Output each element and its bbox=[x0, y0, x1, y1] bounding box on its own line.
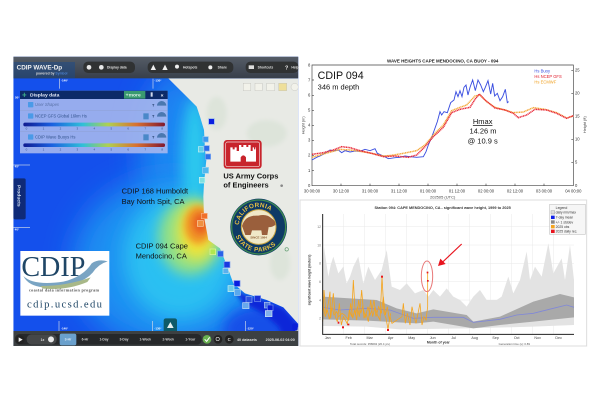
shallow coastal water, southern bight bbox=[233, 288, 298, 347]
line: Hs ECMWF bbox=[312, 95, 573, 157]
bottom timeline bar: 2025-06-02 04:00 bbox=[266, 338, 295, 342]
display data panel: +more bbox=[126, 93, 141, 99]
display data panel: Display data bbox=[30, 93, 60, 99]
month labels: Jun bbox=[430, 336, 436, 340]
x axis labels bbox=[304, 188, 582, 193]
top toolbar: powered by Symbol bbox=[36, 72, 68, 76]
left axis title: Height (m) bbox=[301, 116, 305, 134]
footer notes: Total records: 358092 (20.4 yrs) bbox=[350, 342, 390, 346]
y axis labels: 8 bbox=[319, 262, 321, 266]
x axis title: Month of year bbox=[427, 340, 450, 344]
panel: wave model map bbox=[13, 56, 298, 346]
x axis labels: 04 00:00 bbox=[565, 188, 582, 193]
x axis labels: 02 00:00 bbox=[478, 188, 495, 193]
logo: US Army Corps of Engineers: of Engineers bbox=[223, 181, 269, 190]
longitude labels top: -130° bbox=[154, 79, 162, 83]
layer: CDIP wave buoys bbox=[23, 133, 166, 152]
bottom timeline bar: 3-Day bbox=[119, 338, 129, 342]
top toolbar: Share bbox=[218, 66, 227, 70]
left axis labels: 0 bbox=[308, 183, 311, 188]
x axis labels: 02 12:00 bbox=[507, 188, 524, 193]
right axis labels bbox=[575, 68, 580, 188]
map controls bbox=[243, 83, 298, 91]
line: 2025 observations bbox=[323, 272, 428, 329]
month labels bbox=[325, 336, 562, 340]
legend: Hs NCEP GFS bbox=[534, 74, 562, 79]
left axis labels: 6 bbox=[308, 93, 311, 98]
month labels: Feb bbox=[346, 336, 352, 340]
month labels: Jan bbox=[325, 336, 331, 340]
callout: red ellipse bbox=[421, 261, 433, 292]
logo: California State Parks seal: SINCE 1864 bbox=[250, 236, 267, 240]
line: Hs Buoy bbox=[312, 80, 509, 160]
bottom timeline bar: 2-Week bbox=[163, 338, 174, 342]
plot axes bbox=[312, 65, 573, 186]
left axis labels: 5 bbox=[308, 108, 311, 113]
month labels: Nov bbox=[534, 336, 541, 340]
logo: US Army Corps of Engineers: US Army Corps bbox=[223, 172, 278, 181]
right axis labels: 25 bbox=[575, 68, 580, 73]
label: CDIP 168: CDIP 168 Humboldt bbox=[122, 187, 188, 196]
chart title: WAVE HEIGHTS CAPE MENDOCINO, CA BUOY - 094 bbox=[387, 59, 499, 64]
right axis labels: 10 bbox=[575, 137, 580, 142]
y axis labels bbox=[317, 225, 321, 321]
top toolbar bbox=[13, 57, 299, 78]
x axis labels: 30 12:00 bbox=[333, 188, 350, 193]
x axis labels: 01 00:00 bbox=[420, 188, 437, 193]
grid lines bbox=[323, 214, 574, 334]
record low and high markers bbox=[338, 272, 429, 331]
left axis labels: 1 bbox=[308, 168, 311, 173]
layer: CDIP wave buoys: CDIP Wave Buoys Hs bbox=[35, 134, 75, 139]
layer: NCEP GFS: NCEP GFS Global 16km Hs bbox=[35, 113, 87, 118]
month labels: Aug bbox=[471, 336, 478, 340]
month labels: Sep bbox=[492, 336, 499, 340]
legend: Hs ECMWF bbox=[534, 80, 557, 85]
legend: 2025 obs bbox=[556, 225, 570, 229]
y axis title: significant wave height (meters) bbox=[308, 255, 312, 305]
band: daily min/max bbox=[323, 243, 574, 329]
longitude labels top: 40° bbox=[15, 227, 20, 231]
bottom timeline bar: C bbox=[228, 337, 231, 342]
top toolbar: Hotspots bbox=[183, 66, 198, 70]
x axis labels: 31 12:00 bbox=[391, 188, 408, 193]
bottom timeline bar: 1-Year bbox=[185, 338, 196, 342]
legend: 2025 daily rec. bbox=[556, 230, 577, 234]
layer: CDIP wave buoys: T bbox=[152, 135, 155, 140]
station label: 346 m depth bbox=[318, 82, 359, 91]
layer: user shapes: User Shapes bbox=[35, 102, 59, 107]
x axis title: 202505 (UTC) bbox=[430, 195, 456, 200]
y axis labels: 2 bbox=[319, 317, 321, 321]
logo: CDIP bbox=[20, 251, 109, 316]
top toolbar: Help bbox=[291, 66, 299, 70]
infographic canvas bbox=[13, 56, 588, 346]
top toolbar: Shortcuts bbox=[258, 66, 273, 70]
month labels: Oct bbox=[514, 336, 520, 340]
panel: climatology chart bbox=[300, 200, 587, 346]
legend bbox=[534, 68, 562, 85]
collapse tab bbox=[164, 318, 177, 331]
longitude labels top: 50° bbox=[15, 96, 20, 100]
x axis labels: 30 00:00 bbox=[304, 188, 321, 193]
legend bbox=[550, 204, 585, 234]
logo: CDIP: coastal data information program bbox=[29, 288, 100, 293]
arrow: points to record wave height bbox=[438, 244, 462, 266]
y axis labels: 10 bbox=[317, 243, 321, 247]
products tab: Products bbox=[15, 185, 21, 207]
bottom timeline bar: 40 datasets bbox=[237, 338, 257, 342]
bottom right grey land corner bbox=[295, 326, 298, 346]
left axis labels bbox=[308, 62, 311, 188]
logo: California State Parks seal: CALIFORNIA bbox=[234, 202, 272, 224]
longitude labels bottom: -120° bbox=[247, 326, 255, 330]
x axis labels: 01 12:00 bbox=[449, 188, 466, 193]
label: CDIP 168: Bay North Spit, CA bbox=[122, 197, 184, 206]
footer notes bbox=[350, 342, 530, 346]
longitude labels bottom: -130° bbox=[154, 326, 162, 330]
longitude labels bottom: -140° bbox=[61, 326, 69, 330]
map ocean wave height field bbox=[13, 57, 298, 353]
products tab bbox=[13, 178, 26, 219]
longitude labels top: -140° bbox=[61, 79, 69, 83]
left axis labels: 7 bbox=[308, 77, 311, 82]
x axis labels: 31 00:00 bbox=[362, 188, 379, 193]
month labels: Mar bbox=[367, 336, 374, 340]
station label bbox=[318, 70, 364, 91]
month labels: Jul bbox=[451, 336, 456, 340]
line: 7-day mean bbox=[323, 305, 574, 322]
layer: CDIP wave buoys: 0 1 2 3 4 5 6 7 8 bbox=[26, 148, 163, 152]
axes bbox=[323, 214, 574, 334]
bottom timeline bar: 3-Hr bbox=[65, 338, 72, 342]
bottom timeline bar bbox=[13, 331, 298, 346]
left axis labels: 2 bbox=[308, 153, 311, 158]
bottom timeline bar: 1-Day bbox=[99, 338, 109, 342]
month labels: May bbox=[408, 336, 415, 340]
layer: NCEP GFS bbox=[23, 112, 166, 131]
logo: US Army Corps of Engineers bbox=[223, 140, 283, 190]
band: plus or minus 1 stddev bbox=[323, 294, 574, 328]
top toolbar: CDIP WAVE-Dp bbox=[17, 64, 62, 71]
layer: NCEP GFS: T bbox=[152, 114, 155, 119]
longitude labels top bbox=[13, 79, 162, 231]
display data panel: × bbox=[161, 93, 164, 99]
station label: CDIP 094 bbox=[318, 70, 364, 82]
right axis labels: 15 bbox=[575, 114, 580, 119]
display data panel bbox=[20, 91, 168, 153]
panel: wave height time series chart bbox=[301, 59, 587, 200]
bottom timeline bar: 1-Week bbox=[140, 338, 151, 342]
left axis labels: 8 bbox=[308, 62, 311, 67]
top toolbar: Display data bbox=[107, 66, 127, 70]
top toolbar: ? bbox=[285, 66, 288, 72]
x axis labels: 03 00:00 bbox=[536, 188, 553, 193]
longitude labels top: 45° bbox=[15, 165, 20, 169]
right axis title: Height (ft) bbox=[583, 116, 587, 133]
buoy markers bbox=[197, 119, 298, 331]
layer: user shapes bbox=[28, 101, 166, 108]
bottom timeline bar: 1x bbox=[41, 338, 45, 342]
logo: California State Parks seal bbox=[230, 198, 289, 256]
right axis labels: 20 bbox=[575, 91, 580, 96]
left axis labels: 4 bbox=[308, 123, 311, 128]
legend: 7-day mean bbox=[556, 216, 573, 220]
month labels: Dec bbox=[555, 336, 562, 340]
legend: +/- 1 stddev bbox=[556, 220, 573, 224]
right axis labels: 0 bbox=[575, 183, 578, 188]
logo: CDIP: CDIP bbox=[21, 251, 85, 283]
land bbox=[168, 78, 298, 324]
Hmax annotation: 14.26 m bbox=[469, 126, 497, 135]
legend: daily min/max bbox=[556, 211, 576, 215]
footer notes: Generation time (s): 0.89 bbox=[499, 342, 530, 346]
logo: CDIP: cdip.ucsd.edu bbox=[27, 299, 103, 310]
label: CDIP 094: CDIP 094 Cape bbox=[136, 241, 188, 250]
display data panel: + bbox=[22, 91, 27, 100]
y axis labels: 12 bbox=[317, 225, 321, 229]
legend: Legend bbox=[556, 206, 567, 210]
longitude labels bottom bbox=[59, 321, 255, 331]
logo: California State Parks seal: STATE PARKS bbox=[236, 234, 276, 252]
layer: NCEP GFS: 0 1 2 3 4 5 6 7 8 bbox=[26, 127, 163, 131]
month labels: Apr bbox=[388, 336, 394, 340]
line: Hs NCEP GFS bbox=[312, 94, 573, 157]
layer: user shapes: T bbox=[152, 103, 155, 108]
legend: Hs Buoy bbox=[534, 68, 551, 73]
chart title: Station 094: CAPE MENDOCINO, CA - significant wave height, 1999 to 2025 bbox=[375, 206, 512, 210]
Hmax annotation: Hmax bbox=[473, 117, 493, 126]
bottom timeline bar: 6-Hr bbox=[82, 338, 89, 342]
left axis labels: 3 bbox=[308, 138, 311, 143]
y axis labels: 6 bbox=[319, 280, 321, 284]
y axis labels: 4 bbox=[319, 298, 321, 302]
right axis labels: 5 bbox=[575, 160, 578, 165]
Hmax annotation bbox=[468, 117, 498, 145]
Hmax annotation: @ 10.9 s bbox=[468, 136, 498, 145]
label: CDIP 094: Mendocino, CA bbox=[136, 252, 187, 261]
land relief bbox=[207, 97, 290, 280]
